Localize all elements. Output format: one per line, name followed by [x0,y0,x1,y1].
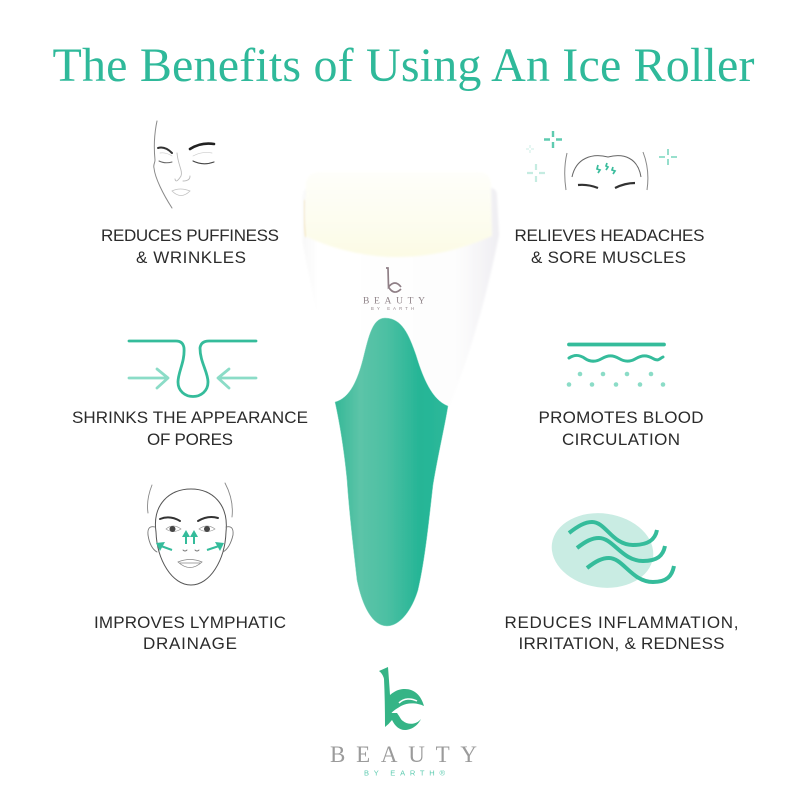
icon: shrinking pore [129,341,256,396]
frozen roller head [305,172,492,257]
text: relieves headaches: RELIEVES HEADACHES [514,226,704,245]
text: reduces puffiness: & WRINKLES [136,248,246,267]
icon: skin layers [567,344,665,387]
tagline: BY EARTH® [364,768,445,778]
product logo: BEAUTY [363,296,425,306]
icon: face with closed eyes [154,121,214,208]
icon: calming waves [547,507,674,594]
wordmark: BEAUTY [330,742,477,767]
product logo [363,268,425,311]
text: improves lymphatic drainage: DRAINAGE [143,634,237,653]
text: shrinks pores: OF PORES [147,430,233,449]
green handle [335,318,448,626]
text: shrinks pores: SHRINKS THE APPEARANCE [72,408,308,427]
product logo: BY EARTH [371,306,414,311]
logo mark [379,667,424,730]
icon: forehead with sparkles [526,131,677,190]
text: promotes blood circulation: CIRCULATION [562,430,680,449]
roller head edge [304,200,306,237]
roller body [303,188,499,407]
brand logo [330,667,477,778]
text: promotes blood circulation: PROMOTES BLOOD [538,408,704,427]
logo leaf highlight [399,699,417,703]
text: improves lymphatic drainage: IMPROVES LYMPHATIC [94,613,286,632]
text: relieves headaches: & SORE MUSCLES [531,248,686,267]
text: reduces inflammation: IRRITATION, & REDNESS [518,634,724,653]
title: The Benefits of Using An Ice Roller [52,39,755,92]
text: reduces inflammation: REDUCES INFLAMMATION, [504,613,738,632]
icon: face with drainage arrows [148,483,233,585]
text: reduces puffiness: REDUCES PUFFINESS [101,226,279,245]
panel: ice roller product [303,172,499,626]
